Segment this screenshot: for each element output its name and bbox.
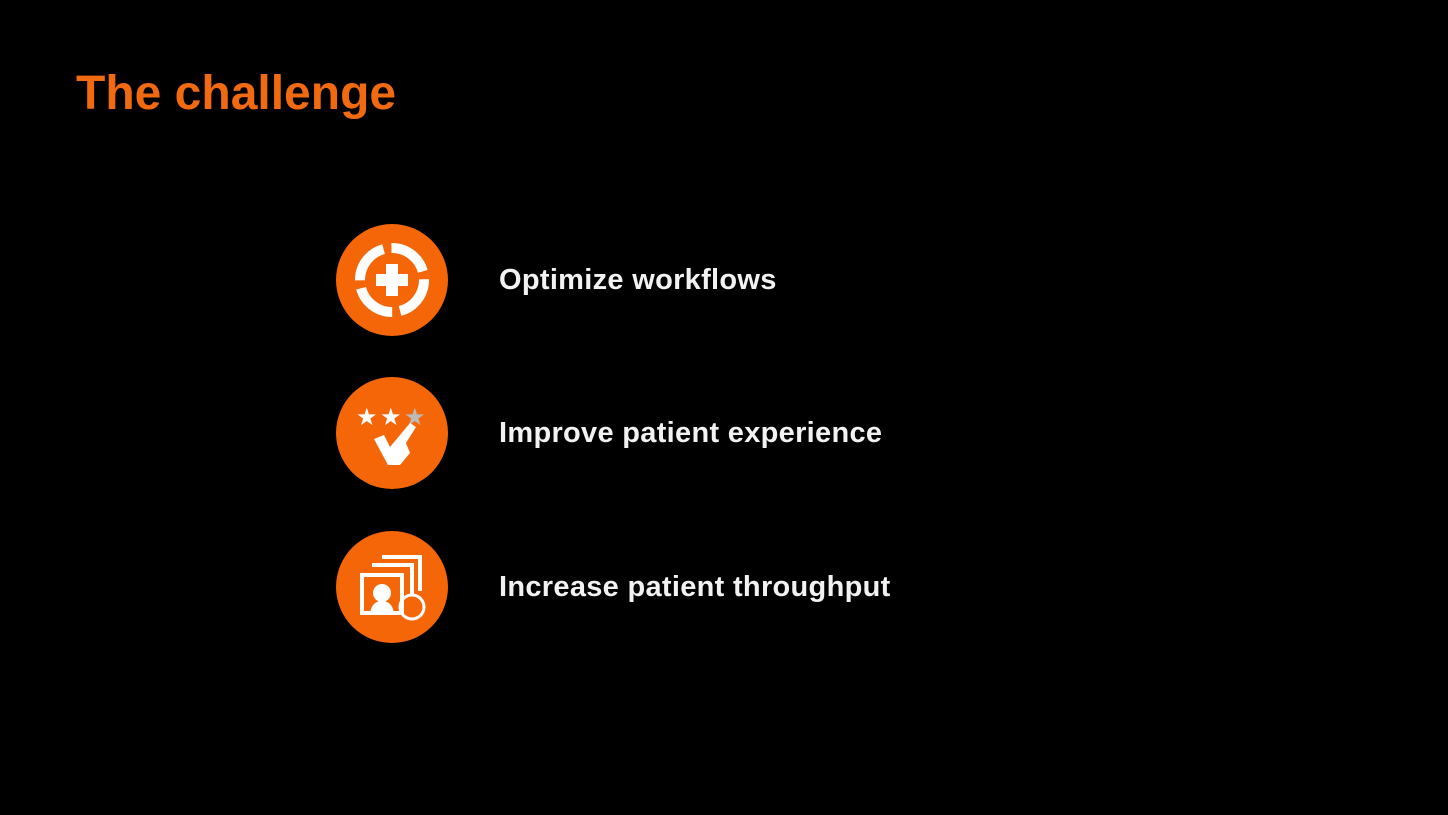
icon: throughput frames <box>336 531 448 643</box>
icon: rating hand: ★ <box>380 404 402 431</box>
label: increase patient throughput: Increase patient throughput <box>499 571 891 603</box>
title: The challenge <box>76 67 396 120</box>
label: optimize workflows: Optimize workflows <box>499 264 777 296</box>
icon: rating hand <box>336 377 448 489</box>
icon: workflow cycle with cross <box>336 224 448 336</box>
icon: rating hand: ★ <box>356 404 378 431</box>
label: improve patient experience: Improve patient experience <box>499 417 882 449</box>
icon: rating hand: ★ <box>404 404 426 431</box>
